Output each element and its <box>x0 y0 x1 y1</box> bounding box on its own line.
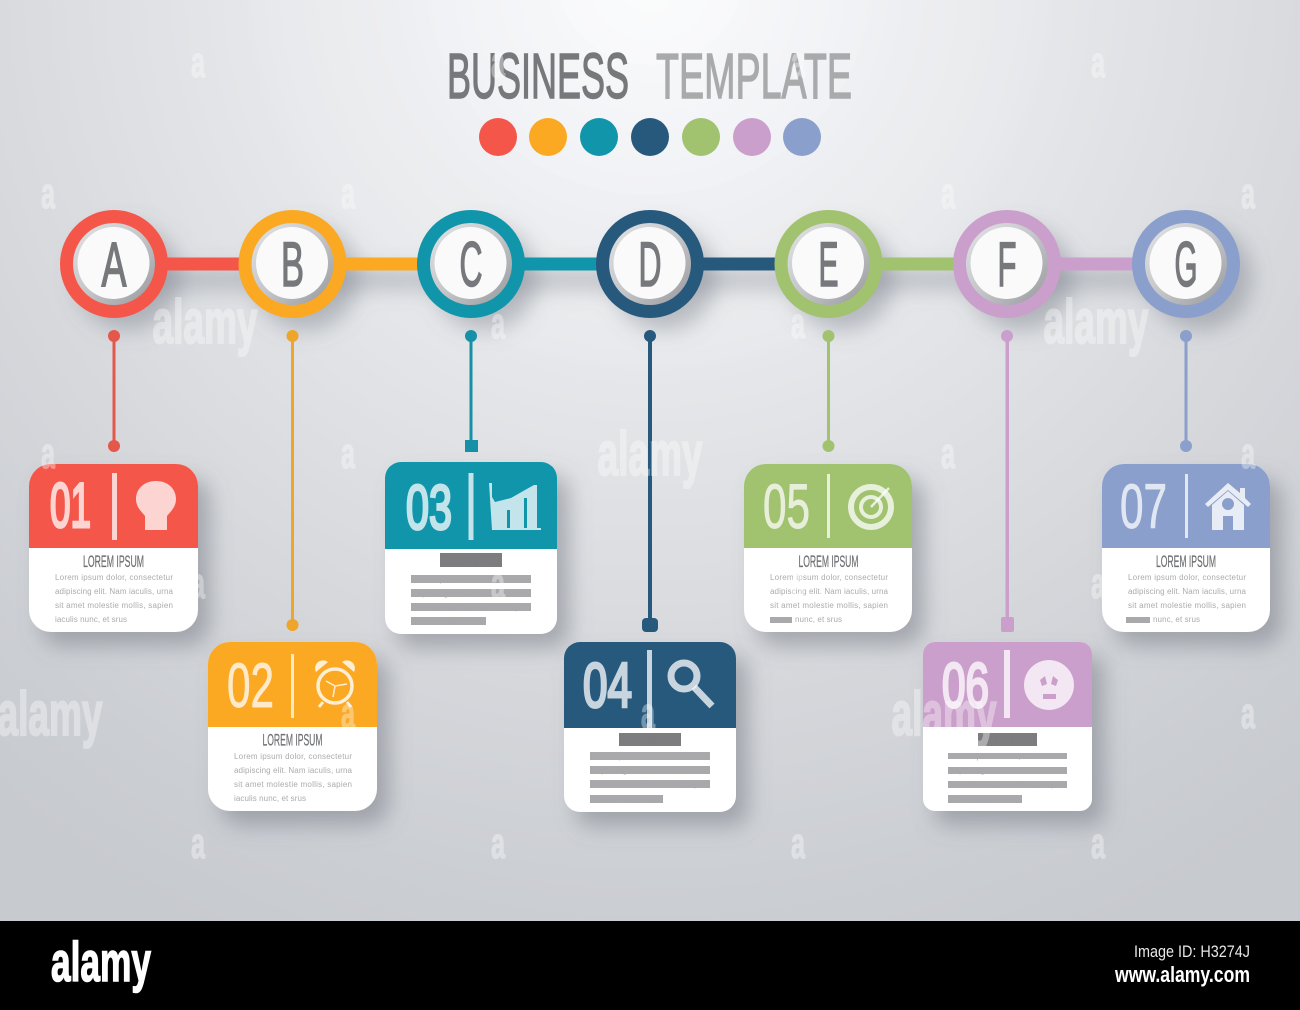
node A: A <box>102 230 126 300</box>
watermarks: a <box>191 559 205 608</box>
watermarks: a <box>491 299 505 348</box>
icon: magnifier <box>671 663 712 706</box>
watermarks: a <box>191 38 205 87</box>
node F <box>953 210 1061 318</box>
stem D to card 04 <box>642 330 658 632</box>
card 02 <box>208 642 389 825</box>
card 03 <box>385 462 569 648</box>
node B <box>238 210 346 318</box>
footer logo: alamy <box>51 930 151 993</box>
number 04: 04 <box>583 651 632 721</box>
heading 04: LOREM IPSUM <box>620 733 680 748</box>
stem F to card 06 <box>1001 330 1014 632</box>
icon: house <box>1205 483 1251 530</box>
node G: G <box>1174 230 1198 300</box>
body text 04: adipiscing elit. Nam iaculis, urna <box>590 766 711 775</box>
watermarks: a <box>341 169 355 218</box>
body text 04 <box>590 752 711 804</box>
body text 01: adipiscing elit. Nam iaculis, urna <box>55 587 174 596</box>
card 06 <box>923 642 1104 825</box>
card 04 <box>564 642 748 826</box>
body text 01 <box>55 573 174 624</box>
watermarks: a <box>791 819 805 868</box>
body text 07: nunc, et srus <box>1153 615 1200 624</box>
heading 06: LOREM IPSUM <box>978 733 1036 748</box>
body text 03: adipiscing elit. Nam iaculis, urna <box>411 589 532 598</box>
colour dots legend <box>479 118 821 156</box>
watermarks: a <box>1241 429 1255 478</box>
icon: gear face <box>1024 660 1074 710</box>
icon: bar chart <box>489 483 541 530</box>
body text 05 <box>770 573 889 624</box>
number 06: 06 <box>942 651 989 721</box>
stem C to card 03 <box>465 330 478 452</box>
body text 06: sit amet molestie mollis, sapien <box>948 780 1067 789</box>
body text 07: adipiscing elit. Nam iaculis, urna <box>1128 587 1247 596</box>
heading 02: LOREM IPSUM <box>262 732 322 750</box>
heading 04 <box>619 733 681 748</box>
stem A to card 01 <box>108 330 120 452</box>
node D <box>596 210 704 318</box>
node C <box>417 210 525 318</box>
watermarks <box>0 38 1255 868</box>
heading 03 <box>440 553 502 568</box>
node D: D <box>638 230 662 300</box>
icon: target <box>851 487 891 527</box>
watermarks: a <box>941 429 955 478</box>
watermarks: a <box>791 299 805 348</box>
icon: alarm clock <box>315 660 355 707</box>
watermarks: a <box>41 169 55 218</box>
watermarks: a <box>191 819 205 868</box>
body text 05: adipiscing elit. Nam iaculis, urna <box>770 587 889 596</box>
body text 02: sit amet molestie mollis, sapien <box>234 780 352 789</box>
body text 03: iaculis nunc, et srus <box>411 617 486 626</box>
stem G to card 07 <box>1180 330 1192 452</box>
timeline connectors <box>114 258 1186 270</box>
body text 06: adipiscing elit. Nam iaculis, urna <box>948 766 1068 775</box>
card 01 <box>29 464 210 646</box>
node C: C <box>460 230 482 300</box>
watermarks: alamy <box>152 288 258 357</box>
icon: light bulb <box>136 481 176 530</box>
watermarks: a <box>1091 38 1105 87</box>
body text 02 <box>234 752 353 803</box>
watermarks: a <box>341 689 355 738</box>
website: www.alamy.com <box>1114 962 1250 987</box>
watermarks: alamy <box>0 680 103 749</box>
body text 06: Lorem ipsum dolor, consectetur <box>948 752 1067 761</box>
body text 05: nunc, et srus <box>795 615 842 624</box>
body text 04: sit amet molestie mollis, sapien <box>590 780 710 789</box>
body text 04: iaculis nunc, et srus <box>590 795 663 804</box>
body text 01: sit amet molestie mollis, sapien <box>55 601 173 610</box>
body text 05: sit amet molestie mollis, sapien <box>770 601 888 610</box>
number 07: 07 <box>1120 472 1167 542</box>
watermarks: a <box>41 429 55 478</box>
number 03: 03 <box>406 473 452 543</box>
body text 06 <box>948 752 1068 804</box>
watermarks: a <box>1091 819 1105 868</box>
number 01: 01 <box>50 471 91 541</box>
number 05: 05 <box>763 472 810 542</box>
stem E to card 05 <box>822 330 834 452</box>
watermarks: a <box>941 169 955 218</box>
body text 03: Lorem ipsum dolor, consectetur <box>411 575 531 584</box>
body text 03 <box>411 575 532 626</box>
watermarks: a <box>791 38 805 87</box>
watermarks: a <box>1091 559 1105 608</box>
heading 03: LOREM IPSUM <box>441 553 501 568</box>
body text 05: Lorem ipsum dolor, consectetur <box>770 573 888 582</box>
watermarks: a <box>1241 169 1255 218</box>
watermarks: a <box>491 819 505 868</box>
node A <box>60 210 168 318</box>
body text 07: sit amet molestie mollis, sapien <box>1128 601 1246 610</box>
body text 06: iaculis nunc, et srus <box>948 795 1022 804</box>
body text 02: iaculis nunc, et srus <box>234 794 306 803</box>
watermarks: a <box>1241 689 1255 738</box>
node B: B <box>281 230 304 300</box>
heading 01: LOREM IPSUM <box>83 553 144 571</box>
footer bar <box>0 921 1300 1010</box>
heading 07: LOREM IPSUM <box>1156 553 1216 571</box>
watermarks: a <box>491 559 505 608</box>
title word: business: BUSINESS <box>447 40 629 112</box>
heading 06 <box>978 733 1037 748</box>
body text 02: adipiscing elit. Nam iaculis, urna <box>234 766 353 775</box>
node F: F <box>998 230 1016 300</box>
node E: E <box>818 230 838 300</box>
watermarks: a <box>791 559 805 608</box>
title word: template: TEMPLATE <box>656 40 852 112</box>
watermarks: alamy <box>892 680 997 749</box>
watermarks: a <box>491 38 505 87</box>
watermarks: a <box>341 429 355 478</box>
body text 01: Lorem ipsum dolor, consectetur <box>55 573 173 582</box>
node E <box>774 210 882 318</box>
watermarks: alamy <box>598 420 703 489</box>
title <box>447 40 852 112</box>
watermarks: alamy <box>1044 288 1149 357</box>
image id: Image ID: H3274J <box>1134 942 1250 961</box>
body text 07 <box>1126 573 1247 624</box>
body text 02: Lorem ipsum dolor, consectetur <box>234 752 352 761</box>
stem B to card 02 <box>286 330 298 631</box>
body text 03: sit amet molestie mollis, sapien <box>411 603 531 612</box>
heading 05: LOREM IPSUM <box>798 553 858 571</box>
card 07 <box>1102 464 1282 646</box>
body text 01: iaculis nunc, et srus <box>55 615 127 624</box>
number 02: 02 <box>227 651 274 721</box>
body text 04: Lorem ipsum dolor, consectetur <box>590 752 710 761</box>
node G <box>1132 210 1240 318</box>
card 05 <box>744 464 924 646</box>
watermarks: a <box>641 689 655 738</box>
timeline shadows <box>76 226 1252 330</box>
body text 07: Lorem ipsum dolor, consectetur <box>1128 573 1246 582</box>
